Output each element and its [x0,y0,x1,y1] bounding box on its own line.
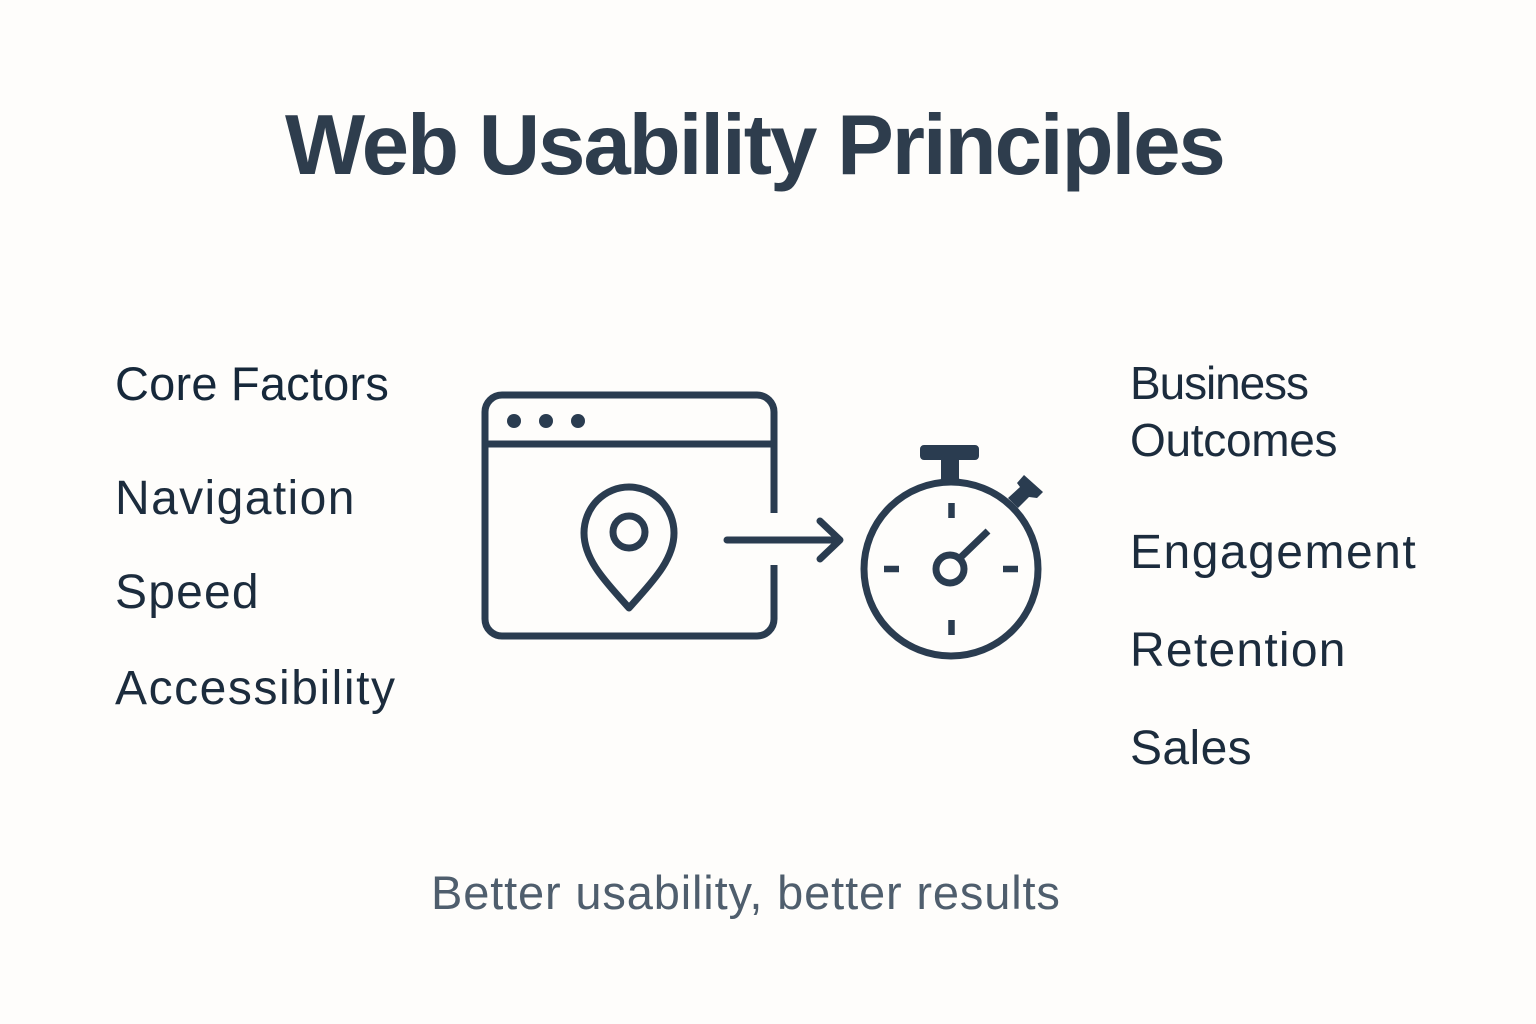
item: retention: Retention [1130,624,1347,677]
arrow [727,521,840,559]
item: navigation: Navigation [115,472,356,525]
heading: business outcomes: Business [1130,357,1308,409]
tagline: Better usability, better results [431,866,1061,919]
title: Web Usability Principles [285,98,1224,193]
heading: business outcomes: Outcomes [1130,414,1337,466]
item: speed: Speed [115,566,260,619]
item: sales: Sales [1130,722,1252,775]
icon: location pin [584,487,674,608]
item: engagement: Engagement [1130,526,1417,579]
heading: business outcomes [1130,357,1337,466]
heading: core factors: Core Factors [115,357,389,410]
item: accessibility: Accessibility [115,662,397,715]
panel: core factors [115,357,397,715]
icon: stopwatch [864,445,1043,656]
panel: business outcomes [1130,357,1417,775]
icon: browser window [485,395,774,636]
